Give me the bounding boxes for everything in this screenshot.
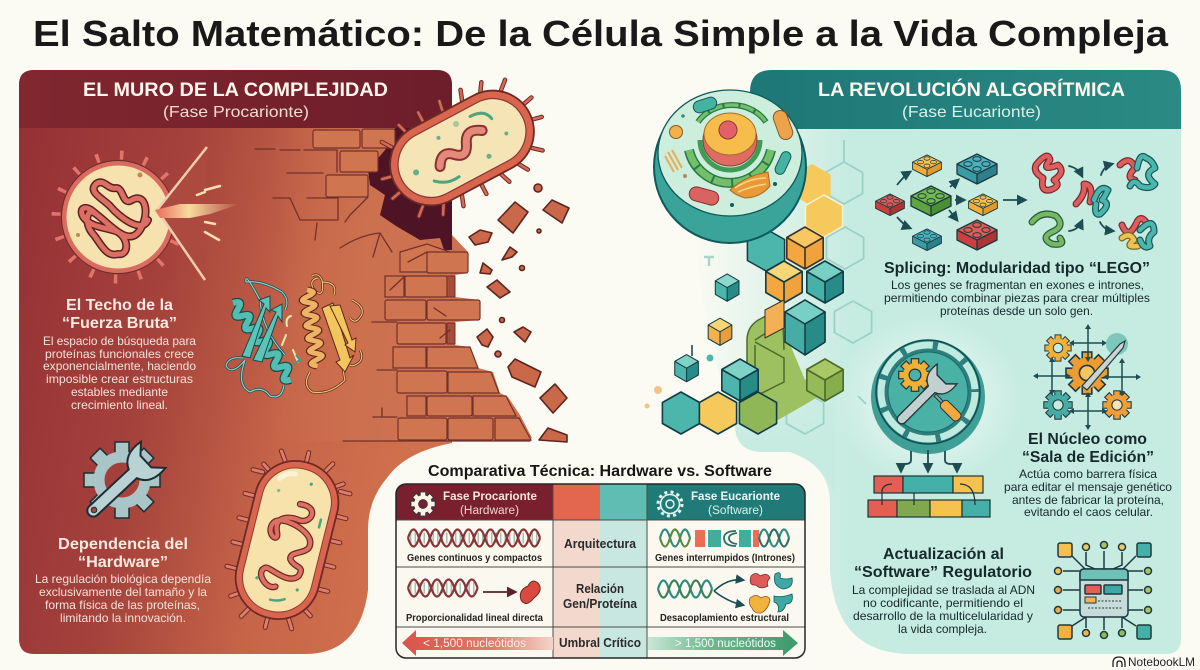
row 3: right arrow: > 1,500 nucleótidos <box>675 638 776 650</box>
row 1: label: Arquitectura <box>564 537 637 551</box>
text block: fuerza bruta: proteínas funcionales crece <box>45 347 194 361</box>
heading: dependencia del hardware: “Hardware” <box>78 554 168 571</box>
heading: El techo de la fuerza bruta <box>62 297 177 332</box>
row 1: right DNA with introns <box>660 530 789 547</box>
heading: software regulatorio <box>854 546 1032 581</box>
icon: large bacterium <box>215 440 359 640</box>
text block: software: la vida compleja. <box>898 622 987 636</box>
text block: fuerza bruta: exponencialmente, haciendo <box>43 359 196 373</box>
text block: hardware: limitando la innovación. <box>60 611 186 625</box>
icon: cell hitting its limit <box>56 147 240 280</box>
table outline <box>396 484 805 658</box>
text block: fuerza bruta: crecimiento lineal. <box>71 398 168 412</box>
row 3: right arrow <box>648 630 798 656</box>
brick wall <box>255 128 532 441</box>
text block: software: La complejidad se traslada al ADN <box>852 583 1035 597</box>
heading: El techo de la fuerza bruta: El Techo de la <box>66 297 173 314</box>
row 2: label: Gen/Proteína <box>563 597 638 611</box>
row 2: left caption: Proporcionalidad lineal directa <box>406 612 543 624</box>
panel background <box>690 129 1181 654</box>
text block: software: desarrollo de la multicelularidad y <box>853 609 1033 623</box>
center column tint <box>553 484 647 658</box>
row 3: left arrow: < 1,500 nucleótidos <box>423 638 526 650</box>
text block: nucleo: evitando el caos celular. <box>1024 505 1153 519</box>
panel background <box>19 70 452 654</box>
text block: software: no codificante, permitiendo el <box>863 596 1023 610</box>
row 2: DNA to decoupled proteins <box>658 573 792 613</box>
title: El Salto Matemático: De la Célula Simple a la Vida Compleja <box>33 13 1169 54</box>
header: fase procarionte: Fase Procarionte <box>443 491 537 503</box>
text block: splicing <box>884 278 1150 318</box>
heading: dependencia del hardware <box>58 536 188 571</box>
text block: nucleo: para editar el mensaje genético <box>1004 480 1172 494</box>
text block: nucleo: Actúa como barrera física <box>1019 467 1157 481</box>
icon: gears and pen <box>1033 324 1141 430</box>
lower blob of the panel <box>735 360 835 500</box>
heading: nucleo: El Núcleo como <box>1028 431 1147 448</box>
text block: nucleo <box>1004 467 1172 519</box>
icon: LEGO bricks <box>876 154 1025 251</box>
text block: splicing: proteínas desde un solo gen. <box>940 304 1093 318</box>
panel: La revolución algorítmica <box>644 70 1181 654</box>
heading: splicing: Splicing: Modularidad tipo “LEGO” <box>884 260 1150 277</box>
text block: hardware: exclusivamente del tamaño y la <box>39 585 207 599</box>
icon: wrench and gear <box>76 441 166 528</box>
heading: El techo de la fuerza bruta: “Fuerza Bruta” <box>62 315 177 332</box>
row 1: right caption: Genes interrumpidos (Intrones) <box>655 552 795 564</box>
text block: fuerza bruta <box>43 334 196 412</box>
text block: fuerza bruta: El espacio de búsqueda para <box>43 334 196 348</box>
row 2: label: Relación <box>576 582 624 596</box>
text block: splicing: permitiendo combinar piezas para crear múltiples <box>884 291 1150 305</box>
text block: software <box>852 583 1035 636</box>
header: fase procarionte <box>396 484 553 520</box>
heading: dependencia del hardware: Dependencia del <box>58 536 188 553</box>
header: fase eucarionte: (Software) <box>708 505 763 517</box>
heading: nucleo: “Sala de Edición” <box>1022 449 1154 466</box>
soft glow behind nucleus <box>833 315 1023 485</box>
heading: software regulatorio: “Software” Regulatorio <box>854 564 1032 581</box>
heading: LA REVOLUCIÓN ALGORÍTMICA <box>818 79 1125 101</box>
hexagon staircase <box>644 140 872 434</box>
header band <box>750 70 1181 129</box>
text block: hardware: forma física de las proteínas, <box>45 598 200 612</box>
heading: software regulatorio: Actualización al <box>883 546 1004 563</box>
text block: fuerza bruta: imposible crear estructuras <box>46 372 193 386</box>
heading: nucleo <box>1022 431 1154 466</box>
icon: circuit software <box>1054 542 1152 639</box>
table background <box>396 484 805 658</box>
icon: nucleus workshop <box>868 340 990 517</box>
falling brick debris <box>469 184 569 442</box>
subheading: (Fase Procarionte) <box>163 104 309 121</box>
eukaryotic cell <box>654 90 806 243</box>
header: fase procarionte: (Hardware) <box>460 505 519 517</box>
table title: Comparativa Técnica: Hardware vs. Software <box>428 463 772 480</box>
icon: teal and gold proteins <box>226 275 362 397</box>
header band <box>19 70 452 128</box>
panel: El muro de la complejidad <box>19 62 569 654</box>
text block: hardware <box>35 572 211 625</box>
header: fase eucarionte <box>647 484 805 520</box>
row 1: left caption: Genes continuos y compactos <box>407 552 542 564</box>
NotebookLM logo: NotebookLM <box>1128 655 1195 669</box>
text block: nucleo: antes de fabricar la proteína, <box>1012 493 1164 507</box>
subheading: (Fase Eucarionte) <box>902 104 1041 121</box>
bacterium breaking through the wall <box>363 62 561 234</box>
row 2: right caption: Desacoplamiento estructural <box>660 612 789 624</box>
header: fase eucarionte: Fase Eucarionte <box>691 491 780 503</box>
row 3: label: Umbral Crítico <box>559 636 641 650</box>
row 1: left DNA <box>408 530 540 546</box>
heading: EL MURO DE LA COMPLEJIDAD <box>83 80 388 101</box>
icon: spliced proteins <box>1032 156 1155 247</box>
comparison table section <box>396 463 805 658</box>
row 3: left arrow <box>402 630 553 656</box>
text block: hardware: La regulación biológica dependía <box>35 572 211 586</box>
text block: splicing: Los genes se fragmentan en exones e intrones, <box>891 278 1144 292</box>
row 2: DNA to protein, linear <box>408 580 540 604</box>
row 2: label <box>563 582 638 611</box>
text block: fuerza bruta: estables mediante <box>71 385 168 399</box>
